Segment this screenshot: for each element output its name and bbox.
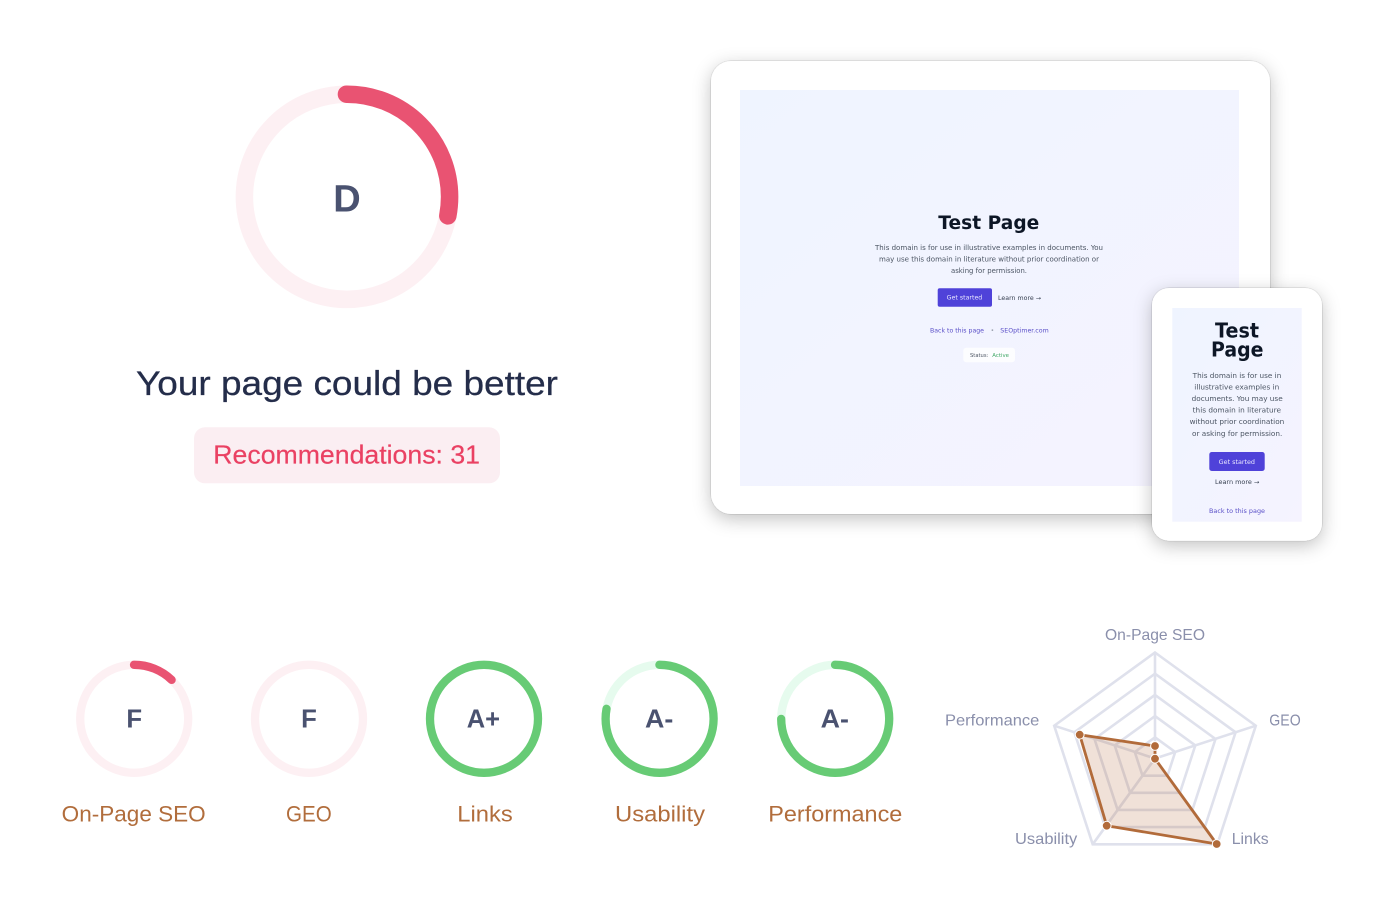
radar axis labels: Links: [1232, 831, 1269, 848]
phone preview: Test: [1215, 318, 1259, 342]
radar axis labels: Performance: [945, 713, 1039, 730]
tablet preview: Get started: [947, 294, 982, 302]
gauge: Links: Links: [457, 802, 513, 827]
phone preview: Back to this page: [1209, 508, 1265, 515]
tablet preview: This domain is for use in illustrative examples in documents. You: [874, 243, 1103, 252]
phone preview: documents. You may use: [1192, 394, 1283, 403]
phone preview: or asking for permission.: [1192, 429, 1282, 438]
phone preview: without prior coordination: [1190, 417, 1284, 426]
gauge: Performance: Performance: [768, 802, 902, 827]
gauge: GEO: F: [301, 706, 317, 734]
phone preview: Learn more →: [1215, 479, 1259, 486]
tablet preview: may use this domain in literature without prior coordination or: [879, 254, 1099, 264]
tablet preview: SEOptimer.com: [1000, 328, 1049, 334]
gauge: GEO: [255, 665, 363, 827]
gauge: Performance: A-: [821, 706, 849, 734]
tablet preview: Test Page: [938, 212, 1039, 234]
gauge: On-Page SEO: [62, 665, 206, 827]
heading: Your page could be better: [136, 365, 558, 403]
phone preview: illustrative examples in: [1194, 382, 1279, 392]
main grade gauge: [244, 94, 450, 299]
recommendations badge: Recommendations: 31: [213, 439, 480, 469]
radar chart: [945, 627, 1301, 848]
phone preview: [1152, 288, 1322, 541]
phone preview: This domain is for use in: [1192, 371, 1281, 380]
recommendations badge: [194, 427, 500, 483]
phone preview: Page: [1211, 338, 1264, 362]
tablet preview: Status:: [970, 353, 988, 359]
phone preview: this domain in literature: [1193, 406, 1282, 414]
phone preview: Get started: [1219, 459, 1255, 466]
radar axis labels: GEO: [1269, 713, 1301, 730]
tablet preview: Active: [992, 353, 1010, 359]
tablet preview: •: [991, 328, 994, 334]
gauge: Links: [430, 665, 538, 827]
main grade gauge: D: [333, 179, 361, 221]
tablet preview: Learn more →: [998, 295, 1041, 302]
gauge: Usability: Usability: [615, 802, 705, 827]
tablet preview: asking for permission.: [951, 266, 1027, 275]
tablet preview: [711, 61, 1270, 514]
radar data area: [1075, 730, 1221, 848]
gauge: Performance: [768, 665, 902, 827]
gauge: Links: A+: [467, 706, 500, 734]
radar axis labels: [945, 627, 1301, 848]
tablet preview: Back to this page: [930, 328, 984, 334]
gauge: Usability: A-: [645, 706, 673, 734]
gauge: On-Page SEO: F: [126, 706, 142, 734]
radar axis labels: On-Page SEO: [1105, 627, 1205, 644]
gauge: Usability: [606, 665, 714, 827]
gauge: GEO: GEO: [286, 802, 332, 827]
gauge: On-Page SEO: On-Page SEO: [62, 802, 206, 827]
radar axis labels: Usability: [1015, 831, 1077, 848]
